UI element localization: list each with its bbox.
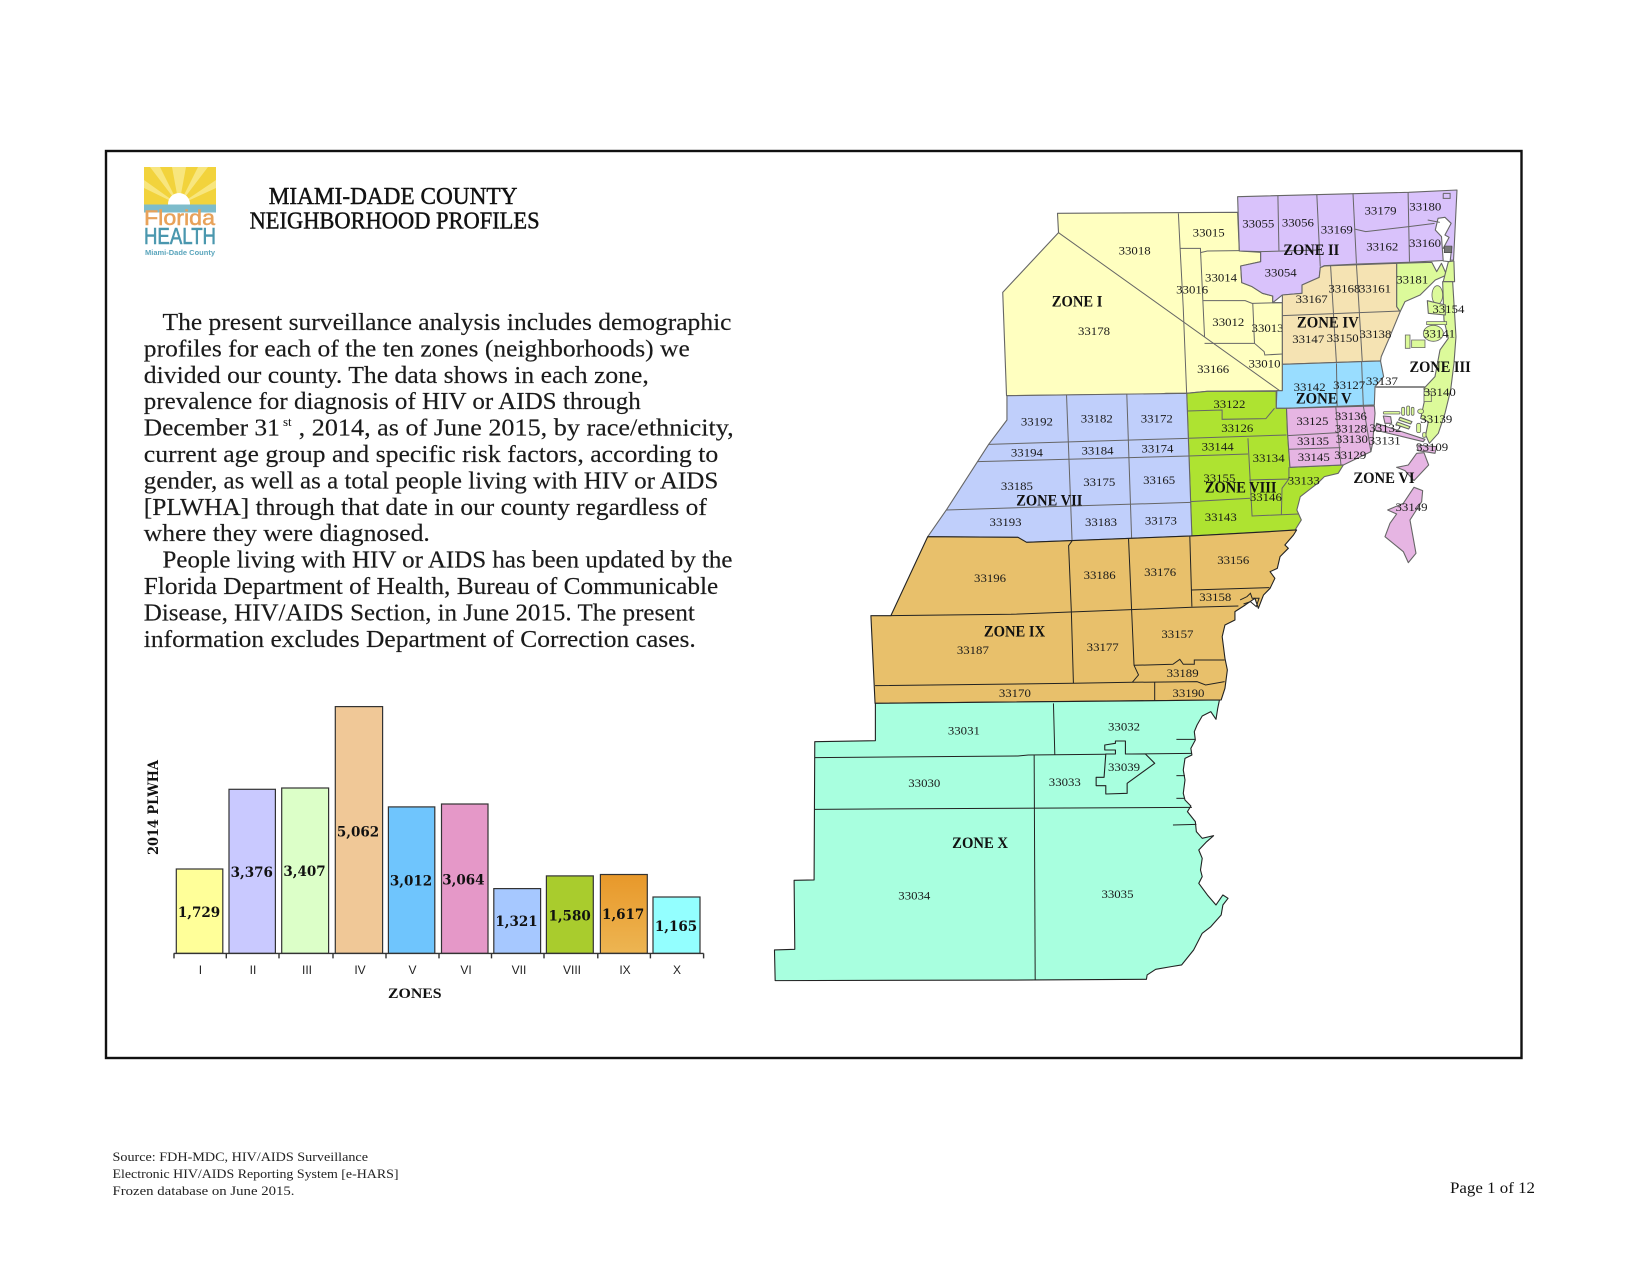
zone VIII labels: 33146: [1250, 490, 1282, 504]
zone V labels: 33142: [1294, 380, 1326, 394]
zone VIII labels: 33144: [1202, 440, 1234, 454]
zone X labels: 33035: [1101, 887, 1134, 901]
x axis title: ZONES: [388, 986, 442, 1002]
zone IX labels: 33176: [1144, 565, 1176, 579]
zone VII labels: 33165: [1143, 473, 1175, 487]
zone tick labels: I: [199, 963, 202, 977]
text block: description: profiles for each of the ten zones (neighborhoods) we: [144, 336, 690, 362]
zone II labels: 33054: [1265, 266, 1297, 280]
zone VI labels: 33128: [1335, 422, 1367, 436]
zone VII labels: 33183: [1085, 515, 1117, 529]
icon: Florida Health logo: [144, 167, 216, 257]
zone V: [1276, 361, 1398, 408]
zone IV labels: 33168: [1328, 282, 1360, 296]
zone VI labels: 33129: [1334, 448, 1366, 462]
title: NEIGHBORHOOD PROFILES: [250, 208, 540, 234]
bar chart: 2014 PLWHA by zone: [146, 707, 704, 1002]
zone II labels: 33056: [1282, 215, 1314, 229]
bar values: 5,062: [337, 825, 379, 841]
zone IX labels: 33170: [999, 686, 1031, 700]
zone IX labels: 33189: [1167, 666, 1199, 680]
zone IX labels: 33187: [957, 643, 989, 657]
zone X labels: 33033: [1049, 775, 1081, 789]
zone IV labels: [1292, 281, 1391, 346]
zone IV labels: 33147: [1292, 332, 1324, 346]
zone V labels: [1294, 374, 1398, 407]
zone X: [774, 700, 1228, 981]
zone V labels: ZONE V: [1296, 391, 1352, 407]
zone III: [1376, 261, 1471, 443]
source note: Frozen database on June 2015.: [112, 1183, 294, 1198]
zone II: [1238, 190, 1457, 303]
zone VI labels: 33125: [1296, 414, 1328, 428]
zone V labels: 33137: [1366, 374, 1398, 388]
source note: Electronic HIV/AIDS Reporting System [e-HARS]: [112, 1166, 398, 1181]
zone II labels: 33160: [1409, 236, 1441, 250]
zone tick labels: VIII: [563, 963, 581, 977]
zone I labels: 33010: [1248, 357, 1280, 371]
zone tick labels: [199, 963, 681, 977]
zone VIII labels: 33134: [1253, 451, 1285, 465]
zone IX: [871, 530, 1297, 703]
zone X labels: ZONE X: [952, 835, 1009, 852]
zone III labels: 33140: [1424, 385, 1456, 399]
bar values: 1,165: [655, 919, 697, 935]
zone IV labels: 33150: [1327, 331, 1359, 345]
zone III labels: 33154: [1432, 302, 1464, 316]
zone VIII labels: ZONE VIII: [1205, 480, 1277, 497]
zone IX labels: 33158: [1199, 590, 1231, 604]
zone I labels: 33012: [1212, 315, 1244, 329]
zone III labels: 33141: [1423, 326, 1455, 340]
zone II labels: 33055: [1242, 216, 1274, 230]
zone I labels: 33014: [1205, 271, 1237, 285]
zone VI labels: 33136: [1335, 409, 1367, 423]
bar values: 3,376: [231, 865, 273, 881]
zone VII labels: 33184: [1082, 443, 1114, 457]
zone VII labels: 33185: [1001, 479, 1033, 493]
zone X labels: 33031: [948, 723, 980, 737]
zone VI labels: 33135: [1297, 434, 1329, 448]
zone VI labels: 33131: [1369, 434, 1401, 448]
zone III labels: [1396, 272, 1471, 426]
zone VII labels: 33194: [1011, 445, 1043, 459]
text block: description: where they were diagnosed.: [144, 521, 430, 547]
zone I labels: ZONE I: [1052, 294, 1102, 311]
zone IX labels: 33196: [974, 571, 1006, 585]
zone IX labels: 33157: [1161, 627, 1193, 641]
zone VI labels: 33130: [1336, 432, 1368, 446]
text block: description: The present surveillance analysis includes demographic: [162, 310, 732, 336]
text block: description: current age group and specific risk factors, according to: [144, 442, 718, 468]
zone II labels: [1242, 200, 1441, 280]
bar values: [178, 825, 697, 935]
zone II labels: 33180: [1409, 200, 1441, 214]
zone VI labels: [1296, 409, 1448, 514]
zone VIII labels: 33126: [1221, 421, 1253, 435]
axis: [174, 953, 704, 958]
bar values: 3,012: [390, 874, 432, 890]
zone III labels: 33139: [1420, 412, 1452, 426]
text block: description: information excludes Department of Correction cases.: [144, 627, 696, 653]
text block: description: Disease, HIV/AIDS Section, in June 2015. The present: [144, 600, 695, 626]
zone IX labels: 33186: [1084, 568, 1116, 582]
zone VI: [1287, 406, 1448, 563]
zone I labels: 33018: [1119, 243, 1151, 257]
zone tick labels: IV: [354, 963, 366, 977]
zone X labels: 33039: [1108, 760, 1140, 774]
bar values: 3,407: [283, 864, 326, 880]
zone VI labels: 33145: [1298, 450, 1330, 464]
zone V labels: 33127: [1333, 378, 1365, 392]
zone I: [1003, 212, 1284, 396]
zone VII labels: 33193: [990, 515, 1022, 529]
zone X labels: 33032: [1108, 719, 1140, 733]
zone VI labels: 33149: [1396, 500, 1428, 514]
zone VI labels: ZONE VI: [1353, 470, 1415, 487]
zone VII labels: 33182: [1081, 411, 1113, 425]
zone X labels: [898, 719, 1140, 903]
page number: Page 1 of 12: [1450, 1180, 1535, 1197]
map: Miami-Dade zones: [774, 190, 1471, 981]
text block: description: December 31: [144, 416, 280, 442]
zone IX labels: 33190: [1172, 686, 1204, 700]
panel: main frame: [106, 151, 1522, 1058]
source note: [112, 1149, 398, 1198]
zone VII labels: 33192: [1021, 414, 1053, 428]
bar values: 1,729: [178, 905, 220, 921]
zone VIII labels: 33133: [1288, 474, 1320, 488]
zone III labels: 33181: [1396, 272, 1428, 286]
zone X labels: 33030: [908, 776, 940, 790]
text block: description: , 2014, as of June 2015, by race/ethnicity,: [299, 416, 734, 442]
text block: description: st: [283, 414, 292, 429]
zone I labels: 33178: [1078, 324, 1110, 338]
zone VI labels: 33132: [1369, 421, 1401, 435]
title: [250, 184, 540, 234]
zone tick labels: II: [250, 963, 256, 977]
zone tick labels: X: [673, 963, 681, 977]
icon: Florida Health logo: Miami-Dade County: [145, 250, 215, 257]
title: MIAMI-DADE COUNTY: [269, 184, 517, 210]
text block: description: [PLWHA] through that date in our county regardless of: [144, 495, 707, 521]
zone IX labels: 33177: [1087, 640, 1119, 654]
zone I labels: 33013: [1252, 321, 1284, 335]
y axis title: 2014 PLWHA: [146, 759, 162, 855]
zone IV labels: ZONE IV: [1297, 315, 1360, 332]
zone VII: [928, 393, 1192, 542]
zone I labels: 33015: [1193, 225, 1225, 239]
zone VII labels: [990, 411, 1177, 529]
zone III labels: ZONE III: [1409, 359, 1471, 376]
zone VII labels: ZONE VII: [1016, 493, 1082, 509]
zone X labels: 33034: [898, 889, 930, 903]
zone VII labels: 33173: [1145, 513, 1177, 527]
bar values: 1,580: [548, 909, 591, 925]
bar values: 1,617: [602, 907, 644, 923]
zone IV labels: 33138: [1359, 327, 1391, 341]
text block: description: prevalence for diagnosis of HIV or AIDS through: [144, 389, 641, 415]
zone tick labels: VI: [460, 963, 472, 977]
zone VIII: [1187, 391, 1343, 536]
text block: description: divided our county. The data shows in each zone,: [144, 363, 649, 389]
zone I labels: 33016: [1176, 282, 1208, 296]
zone IV labels: 33161: [1359, 281, 1391, 295]
zone VII labels: 33172: [1141, 411, 1173, 425]
zone VIII labels: 33155: [1203, 471, 1235, 485]
text block: description: Florida Department of Health, Bureau of Communicable: [144, 574, 718, 600]
zone IX labels: 33156: [1217, 553, 1249, 567]
zone IV: [1282, 263, 1400, 364]
bar values: 1,321: [495, 914, 538, 930]
zone I labels: [1052, 225, 1284, 376]
zone VIII labels: [1202, 397, 1320, 524]
zone I labels: 33166: [1197, 362, 1229, 376]
text block: description: [144, 310, 734, 653]
zone VIII labels: 33143: [1205, 510, 1237, 524]
zone II labels: ZONE II: [1283, 242, 1339, 259]
zone IX labels: [957, 553, 1249, 700]
text block: description: gender, as well as a total people living with HIV or AIDS: [144, 468, 718, 494]
zone VI labels: 33109: [1416, 440, 1448, 454]
zone IV labels: 33167: [1296, 292, 1328, 306]
zone VIII labels: 33122: [1213, 397, 1245, 411]
zone tick labels: VII: [512, 963, 526, 977]
text block: description: People living with HIV or AIDS has been updated by the: [162, 548, 732, 574]
zone IX labels: ZONE IX: [984, 624, 1046, 641]
zone VII labels: 33175: [1083, 475, 1115, 489]
zone tick labels: III: [302, 963, 312, 977]
bar values: 3,064: [442, 872, 485, 888]
zone VII labels: 33174: [1141, 441, 1173, 455]
bars: [176, 707, 700, 953]
zone II labels: 33169: [1321, 222, 1353, 236]
zone tick labels: IX: [619, 963, 631, 977]
zone II labels: 33162: [1366, 239, 1398, 253]
icon: Florida Health logo: HEALTH: [144, 223, 216, 249]
source note: Source: FDH-MDC, HIV/AIDS Surveillance: [112, 1149, 368, 1164]
zone II labels: 33179: [1365, 203, 1397, 217]
icon: Florida Health logo: Florida: [144, 207, 215, 230]
zone tick labels: V: [408, 963, 417, 977]
